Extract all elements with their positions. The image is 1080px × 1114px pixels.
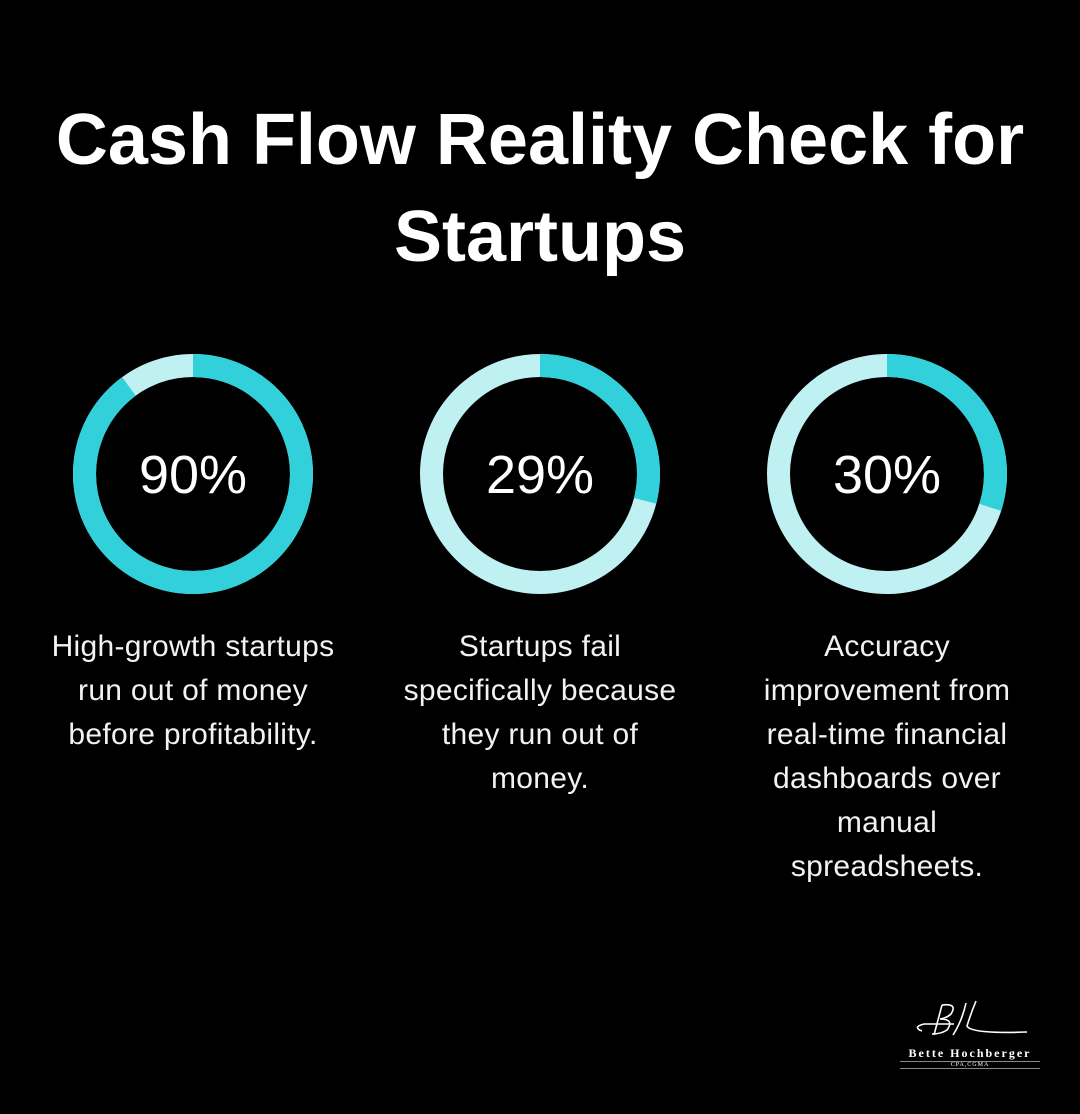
logo: Bette Hochberger <box>909 1046 1031 1060</box>
title: Cash Flow Reality Check for <box>56 100 1024 180</box>
donut: 29% <box>432 366 648 582</box>
text: 90% description: High-growth startups run out of money before profitability. <box>52 630 334 751</box>
logo subtitle: CPA,CGMA <box>951 1062 989 1068</box>
donut: 29%: 29% <box>486 445 594 505</box>
text: 30% description: Accuracy improvement from real-time financial dashboards over manual spreadsheets. <box>764 630 1010 883</box>
donut: 90% <box>84 366 302 582</box>
donut charts <box>73 354 1007 594</box>
logo <box>900 1000 1040 1069</box>
text: 29% description: Startups fail specifically because they run out of money. <box>404 630 676 795</box>
donut: 90%: 90% <box>139 445 247 505</box>
donut: 30%: 30% <box>833 445 941 505</box>
logo subtitle <box>900 1061 1040 1069</box>
title <box>56 100 1024 277</box>
title: Startups <box>394 197 686 277</box>
donut: 30% <box>778 366 996 582</box>
